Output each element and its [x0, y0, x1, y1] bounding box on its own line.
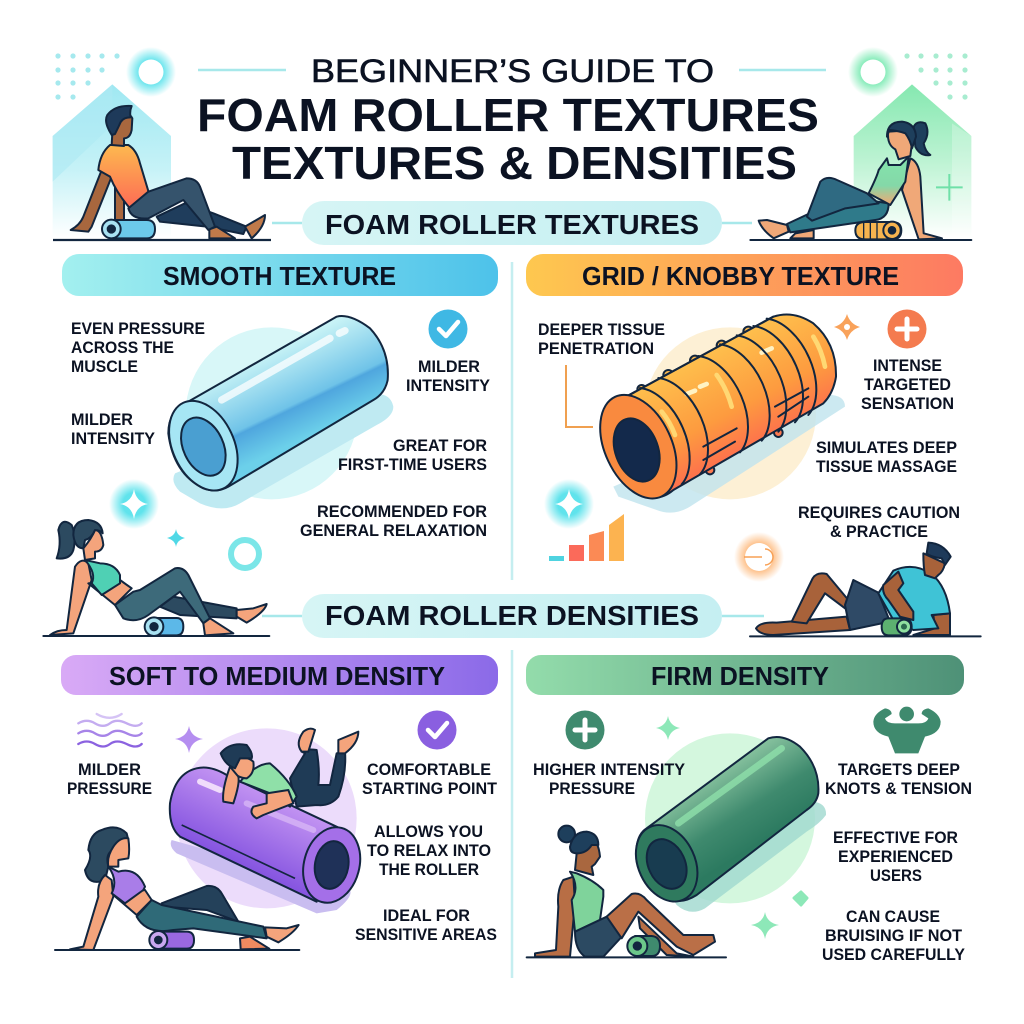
text: recommended for general relaxation: RECOMMENDED FOR: [317, 502, 487, 521]
panel: soft to medium density: [55, 655, 498, 950]
text: ideal for sensitive areas: SENSITIVE AREAS: [355, 925, 497, 944]
text: ideal for sensitive areas: IDEAL FOR: [383, 906, 470, 925]
text: targets deep knots: KNOTS & TENSION: [825, 779, 972, 798]
text: simulates deep tissue massage: TISSUE MASSAGE: [816, 457, 957, 476]
heading: soft to medium: [61, 655, 498, 695]
text: great for first-time users: FIRST-TIME USERS: [338, 455, 487, 474]
text: milder intensity right: INTENSITY: [406, 376, 491, 395]
text: can cause bruising: [822, 907, 966, 964]
icon: check badge purple: [418, 710, 456, 750]
text: requires caution and practice: [798, 503, 960, 541]
roller: smooth: [156, 316, 393, 508]
icon: sparkle: [544, 479, 594, 529]
text: effective for experienced users: EXPERIENCED: [838, 847, 953, 866]
heading: firm density: [526, 655, 964, 695]
icon: mint sparkles: [656, 716, 807, 939]
text: comfortable starting point: COMFORTABLE: [367, 760, 491, 779]
icon: sparkles and ring: [109, 479, 259, 568]
text: comfortable starting point: [362, 760, 498, 798]
text: milder pressure: [67, 760, 152, 798]
heading: smooth texture: SMOOTH TEXTURE: [163, 261, 396, 291]
icon: plus badge green: [566, 710, 604, 750]
panel: smooth texture: [43, 254, 498, 636]
text: great for first-time users: GREAT FOR: [393, 436, 487, 455]
text: allows you to relax: THE ROLLER: [379, 860, 479, 879]
text: milder intensity right: MILDER: [418, 357, 480, 376]
panel: grid / knobby texture: [526, 254, 981, 636]
arrow: bracket line: [566, 365, 593, 427]
text: milder pressure: PRESSURE: [67, 779, 152, 798]
text: even pressure: ACROSS THE: [71, 338, 174, 357]
text: intense targeted sensation: INTENSE: [873, 356, 942, 375]
heading: grid knobby texture: [526, 254, 963, 296]
text: recommended for general relaxation: GENERAL RELAXATION: [300, 521, 487, 540]
text: even pressure: EVEN PRESSURE: [71, 319, 205, 338]
text: can cause bruising: CAN CAUSE: [846, 907, 940, 926]
heading: firm density: FIRM DENSITY: [651, 661, 829, 691]
icon: plus badge: [888, 310, 926, 348]
text: milder intensity right: [406, 357, 491, 395]
decoration: top-right dots: [904, 53, 968, 100]
text: intense targeted sensation: [861, 356, 954, 413]
title line 1: BEGINNER’S GUIDE TO: [311, 53, 714, 89]
text: deeper tissue penetration: DEEPER TISSUE: [538, 320, 665, 339]
icon: orange sparkle: [834, 314, 860, 340]
heading: smooth texture: [62, 254, 498, 296]
illustration: man sitting on smooth roller: [53, 84, 265, 238]
text: simulates deep tissue massage: [816, 438, 957, 476]
text: milder intensity left: MILDER: [71, 410, 133, 429]
text: can cause bruising: USED CAREFULLY: [822, 945, 966, 964]
text: effective for experienced users: USERS: [870, 866, 922, 885]
text: even pressure: [71, 319, 205, 376]
text: milder intensity left: INTENSITY: [71, 429, 156, 448]
icon: pressure waves: [78, 714, 142, 746]
text: intense targeted sensation: SENSATION: [861, 394, 954, 413]
icon: muscle figure: [873, 707, 941, 753]
text: requires caution and practice: REQUIRES CAUTION: [798, 503, 960, 522]
title: [197, 53, 819, 189]
icon: glowing green circle: [848, 47, 898, 97]
text: milder pressure: MILDER: [78, 760, 141, 779]
decoration: top-left dots: [55, 53, 120, 100]
icon: glowing minus circle: [734, 532, 784, 582]
chart: intensity bars: [549, 514, 624, 561]
text: requires caution and practice: & PRACTICE: [830, 522, 928, 541]
text: recommended for general relaxation: [300, 502, 487, 540]
heading: grid knobby texture: GRID / KNOBBY TEXTURE: [582, 261, 899, 291]
icon: check badge: [428, 310, 468, 348]
text: allows you to relax: ALLOWS YOU: [374, 822, 483, 841]
text: can cause bruising: BRUISING IF NOT: [825, 926, 963, 945]
title line 2: FOAM ROLLER TEXTURES: [197, 89, 819, 141]
text: higher intensity pressure: HIGHER INTENSITY: [533, 760, 686, 779]
text: allows you to relax: [367, 822, 491, 879]
text: milder intensity left: [71, 410, 156, 448]
text: deeper tissue penetration: PENETRATION: [538, 339, 654, 358]
text: deeper tissue penetration: [538, 320, 665, 358]
text: higher intensity pressure: PRESSURE: [549, 779, 635, 798]
text: great for first-time users: [338, 436, 487, 474]
text: allows you to relax: TO RELAX INTO: [367, 841, 491, 860]
roller: purple with man resting: [170, 728, 368, 913]
section pill: foam roller densities: [302, 594, 722, 638]
roller: knobby: [585, 314, 845, 513]
text: effective for experienced users: EFFECTIVE FOR: [833, 828, 958, 847]
text: effective for experienced users: [833, 828, 958, 885]
text: comfortable starting point: STARTING POINT: [362, 779, 498, 798]
section pill: foam roller densities: FOAM ROLLER DENSITIES: [325, 600, 699, 631]
text: even pressure: MUSCLE: [71, 357, 138, 376]
text: intense targeted sensation: TARGETED: [864, 375, 951, 394]
heading: soft to medium: SOFT TO MEDIUM DENSITY: [109, 661, 445, 691]
illustration: man lying on roller: [750, 543, 981, 636]
text: targets deep knots: [825, 760, 972, 798]
illustration: woman on smooth roller: [43, 520, 269, 636]
illustration: woman on purple roller: [55, 827, 299, 950]
roller: firm green: [624, 733, 826, 912]
text: higher intensity pressure: [533, 760, 686, 798]
section pill: foam roller textures: FOAM ROLLER TEXTURES: [325, 209, 699, 240]
text: ideal for sensitive areas: [355, 906, 497, 944]
illustration: woman on firm roller: [527, 826, 726, 957]
icon: glowing cyan circle: [126, 47, 176, 97]
title line 3: TEXTURES & DENSITIES: [232, 137, 797, 189]
icon: purple sparkle: [175, 726, 203, 753]
illustration: woman sitting on knobby roller: [750, 84, 971, 240]
text: simulates deep tissue massage: SIMULATES DEEP: [816, 438, 957, 457]
section pill: foam roller textures: [302, 201, 722, 245]
panel: firm density: [526, 655, 972, 964]
text: targets deep knots: TARGETS DEEP: [838, 760, 960, 779]
